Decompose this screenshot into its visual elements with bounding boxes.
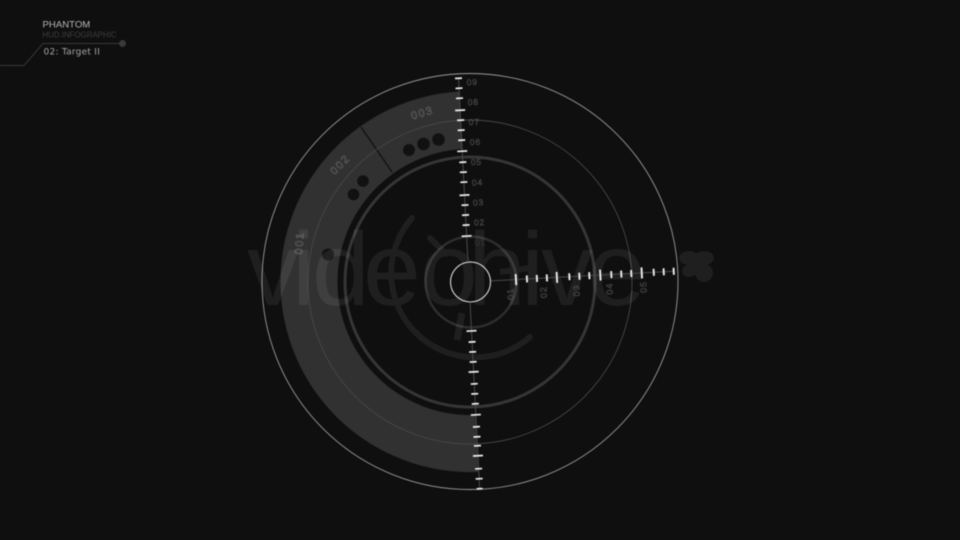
band divider — [361, 127, 392, 172]
leader line — [0, 44, 120, 66]
horizontal scale labels — [505, 281, 649, 300]
leader dot — [119, 40, 126, 47]
inner ring — [426, 236, 516, 328]
horizontal axis scale — [491, 266, 675, 301]
horizontal scale labels: 03 — [571, 284, 582, 297]
vertical scale labels: 02 — [474, 217, 485, 228]
watermark wordmark: videohive — [247, 212, 646, 328]
vertical scale labels: 01 — [475, 237, 486, 248]
axis ticks — [516, 266, 674, 285]
dots: segment 002 — [348, 175, 369, 200]
vertical scale labels — [466, 77, 486, 248]
segment label 003: 003 — [410, 105, 435, 122]
watermark bar lower — [457, 313, 462, 340]
segment label 002: 002 — [328, 153, 353, 177]
segment label 001: 001 — [293, 231, 307, 255]
dot: segment 001 — [322, 248, 334, 260]
watermark bar upper — [430, 238, 446, 254]
horizontal scale labels: 02 — [538, 286, 549, 298]
watermark — [247, 212, 714, 357]
concentric rings — [262, 74, 678, 490]
vertical scale labels: 05 — [471, 157, 482, 167]
watermark swirl — [391, 218, 530, 357]
vertical scale labels: 04 — [472, 177, 483, 188]
subheading: HUD.INFOGRAPHIC: HUD.INFOGRAPHIC — [42, 30, 117, 40]
vertical scale labels: 07 — [469, 117, 480, 127]
axis line — [491, 271, 674, 281]
thick ring — [345, 157, 595, 407]
horizontal scale labels: 04 — [604, 282, 615, 295]
watermark logo — [679, 251, 714, 282]
watermark bar right — [500, 268, 530, 272]
vertical scale labels: 08 — [467, 97, 479, 107]
outer ring — [262, 74, 678, 490]
vertical axis scale — [453, 77, 499, 489]
vertical scale labels: 06 — [470, 137, 481, 147]
horizontal scale labels: 05 — [638, 281, 649, 293]
band arc — [280, 92, 478, 472]
label: 02 Target II: 02: Target II — [44, 48, 100, 58]
title block — [0, 20, 126, 66]
axis ticks — [454, 78, 485, 489]
centre target ring — [450, 262, 490, 302]
thin ring — [308, 120, 632, 444]
vertical scale labels: 03 — [473, 197, 484, 208]
dots: segment 003 — [403, 133, 445, 156]
heading: PHANTOM: PHANTOM — [42, 20, 90, 30]
axis line — [459, 78, 480, 489]
vertical scale labels: 09 — [466, 77, 478, 87]
panel: grey segmented band — [280, 92, 478, 472]
horizontal scale labels: 01 — [505, 288, 516, 300]
